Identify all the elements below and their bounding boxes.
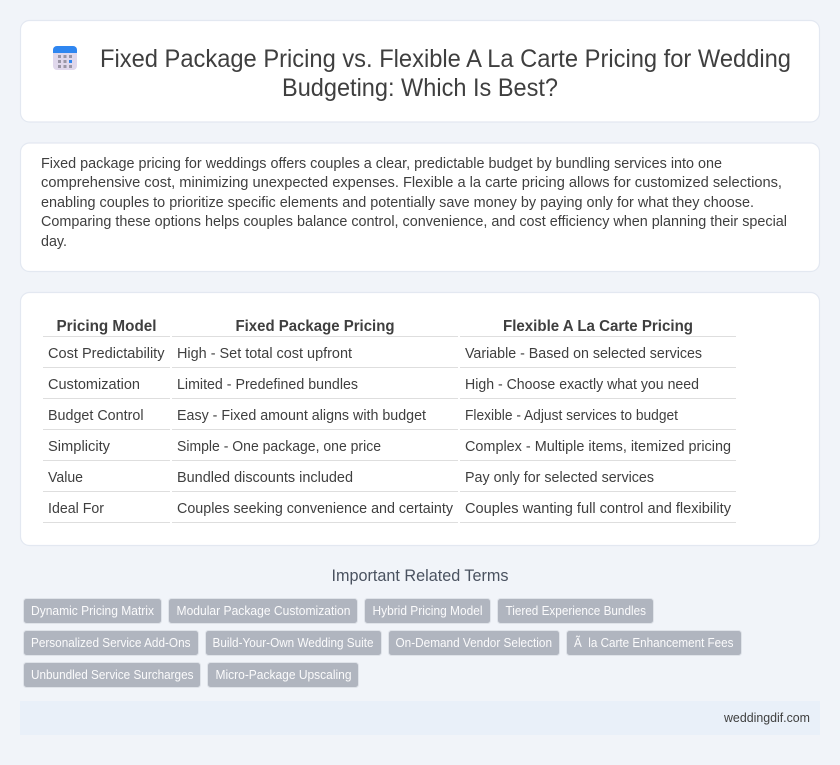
tag: Micro-Package Upscaling [216,668,352,682]
table row: value [48,470,654,486]
tag [206,630,382,656]
tag: On-Demand Vendor Selection [396,636,552,650]
panel: comparison table [20,292,820,546]
table row: cost predictability: Variable - Based on selected services [465,346,702,362]
tag [498,598,654,624]
tag: Build-Your-Own Wedding Suite [212,636,374,650]
table row: budget control [48,408,678,424]
title: Budgeting: Which Is Best? [282,74,558,102]
table row: ideal for: Couples seeking convenience and certainty [177,501,454,517]
table row: ideal for: Ideal For [48,501,104,517]
table row: simplicity: Simple - One package, one price [177,439,381,455]
tag: Hybrid Pricing Model [372,604,482,618]
tag [168,598,358,624]
tag: Modular Package Customization [176,604,350,618]
table row: value: Value [48,470,83,486]
footer: weddingdif.com [723,711,810,725]
table row: cost predictability: High - Set total cost upfront [177,346,352,362]
footer [20,701,820,735]
tag: Ã la Carte Enhancement Fees [574,636,734,650]
table header [56,318,693,335]
title [100,45,791,102]
text block: intro: Fixed package pricing for weddings offers couples a clear, predictable budget by bundling services into one [41,156,722,172]
tag: Dynamic Pricing Matrix [31,604,155,618]
tag [24,630,198,656]
table row: simplicity: Simplicity [48,439,111,455]
table row: customization [48,377,699,393]
table header: Flexible A La Carte Pricing [503,318,693,335]
text block: intro: comprehensive cost, minimizing unexpected expenses. Flexible a la carte pricing allows for customized selections, [41,175,782,191]
table row: ideal for [48,501,732,517]
table row: customization: High - Choose exactly what you need [465,377,699,393]
panel: intro paragraph [20,143,820,272]
table row: value: Bundled discounts included [177,470,353,486]
tag [24,662,200,688]
icon: calendar [53,46,77,70]
table header: Fixed Package Pricing [236,318,394,335]
text block: intro: enabling couples to prioritize specific elements and potentially save money by paying only for what they choose. [41,195,754,211]
table row: cost predictability [48,346,702,362]
heading: related terms: Important Related Terms [332,567,508,585]
tag: Tiered Experience Bundles [506,604,646,618]
table header: Pricing Model [56,318,156,335]
table row: simplicity: Complex - Multiple items, itemized pricing [465,439,731,455]
tag: Personalized Service Add-Ons [31,636,190,650]
tag [388,630,560,656]
table row: budget control: Budget Control [48,408,144,424]
tag [364,598,490,624]
table row: value: Pay only for selected services [465,470,654,486]
table row: ideal for: Couples wanting full control and flexibility [465,501,732,517]
table row: simplicity [48,439,731,455]
text block: intro [41,156,787,250]
title: Fixed Package Pricing vs. Flexible A La Carte Pricing for Wedding [100,45,791,73]
tag [208,662,358,688]
header panel [20,20,820,122]
text block: intro: day. [41,234,67,250]
tag: Unbundled Service Surcharges [31,668,194,682]
text block: intro: Comparing these options helps couples balance control, convenience, and cost efficiency when planning their special [41,214,787,230]
table row: customization: Limited - Predefined bundles [177,377,358,393]
table row: customization: Customization [48,377,140,393]
related term tags [24,598,742,688]
tag [24,598,162,624]
table row: budget control: Easy - Fixed amount aligns with budget [177,408,426,424]
tag [566,630,742,656]
table row: budget control: Flexible - Adjust services to budget [465,408,678,424]
table row: cost predictability: Cost Predictability [48,346,165,362]
